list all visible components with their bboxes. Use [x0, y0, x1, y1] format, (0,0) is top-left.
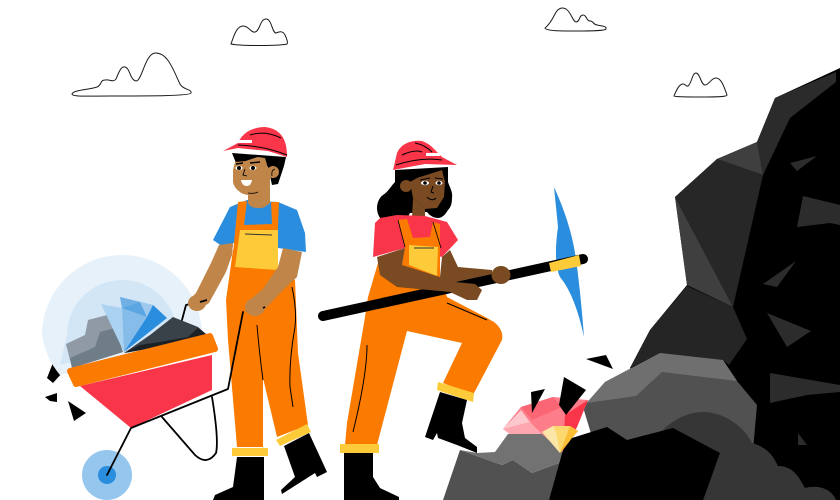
smile — [241, 180, 252, 186]
cuff back — [276, 424, 311, 446]
cuff knee — [437, 382, 474, 402]
low grey rock under woman's boot — [443, 434, 563, 500]
ear line — [272, 169, 275, 176]
ear — [267, 166, 279, 178]
flying rock shards — [45, 355, 613, 421]
left hand — [188, 295, 206, 311]
rock mountain — [583, 68, 840, 500]
straps — [398, 219, 440, 277]
face — [410, 170, 445, 209]
trouser lines — [257, 287, 296, 407]
strap outlines — [398, 220, 441, 248]
mountain black mass — [620, 68, 840, 500]
boulder light top — [587, 353, 737, 403]
foreground black rock — [549, 427, 720, 500]
mouth and nose — [427, 186, 436, 200]
glow inner — [60, 280, 177, 365]
eyes — [236, 162, 260, 170]
neck — [412, 198, 425, 218]
gem top facet — [120, 297, 140, 308]
eyes — [420, 178, 443, 185]
left handle — [182, 300, 207, 320]
gem pale facet — [140, 302, 153, 317]
bib pocket — [235, 230, 278, 270]
ruby red facet — [563, 400, 588, 453]
hat details — [396, 143, 442, 165]
overalls legs and torso — [345, 263, 502, 445]
cloud: top centre — [545, 8, 606, 31]
face and neck — [233, 157, 270, 208]
cloud: small left — [231, 19, 287, 46]
coal — [124, 317, 206, 353]
hub — [98, 466, 116, 484]
diamond body — [542, 426, 578, 453]
ruby top facet — [521, 397, 562, 420]
left arm — [189, 243, 233, 311]
coal dark — [124, 328, 206, 353]
boulder dark mound — [663, 412, 836, 500]
man miner arms — [188, 243, 302, 316]
tray body — [80, 355, 212, 428]
pickaxe — [323, 187, 584, 337]
yellow diamond gem — [542, 426, 578, 453]
gem upper facet — [122, 302, 147, 317]
gems in rock — [503, 397, 588, 453]
right arm — [245, 248, 302, 315]
chin line — [248, 192, 258, 193]
ruby lower light facet — [503, 422, 542, 434]
embedded shards — [763, 156, 840, 445]
cuff front — [232, 448, 268, 456]
ruby base — [503, 397, 588, 453]
wheel — [82, 450, 132, 500]
hat highlight — [238, 140, 252, 143]
trouser lines — [353, 303, 487, 432]
gem left light facet — [101, 304, 124, 352]
boot front — [213, 457, 264, 500]
tray rim — [70, 336, 215, 384]
woman arm and hands — [377, 248, 510, 300]
boot back — [425, 392, 477, 453]
upper hand — [492, 266, 510, 284]
gem dark facet — [124, 305, 167, 352]
handle end right — [263, 307, 265, 308]
glow outer — [42, 255, 202, 375]
straps — [233, 201, 279, 253]
shirt — [213, 200, 306, 253]
hat highlight — [426, 153, 440, 156]
bib pocket — [409, 245, 438, 276]
boot front — [344, 453, 399, 500]
nose — [243, 169, 247, 176]
diamond pale side — [542, 426, 560, 453]
facet: upper light — [717, 142, 763, 175]
boot back — [281, 433, 327, 494]
clouds — [72, 8, 727, 97]
hair — [377, 167, 452, 224]
frame — [107, 312, 243, 475]
cuff front — [340, 444, 379, 453]
pocket line — [245, 234, 272, 235]
ruby pale facet — [503, 410, 530, 429]
facet: upper dark — [675, 159, 763, 307]
ear — [400, 180, 412, 192]
diamond orange side — [560, 426, 578, 453]
cloud: large left — [72, 53, 191, 96]
hat — [393, 141, 457, 170]
handle end — [200, 300, 207, 302]
cloud: top right — [674, 73, 727, 97]
rock dark part — [443, 450, 562, 500]
facet: lower dark — [630, 286, 747, 368]
gem centre — [120, 297, 153, 352]
arm with lower hand — [377, 248, 492, 300]
hat — [223, 127, 287, 157]
rock light part — [460, 434, 563, 473]
woman miner body — [340, 141, 502, 500]
right hand — [245, 298, 265, 316]
handle — [323, 259, 583, 316]
boulder mid grey — [583, 353, 757, 470]
wheelbarrow — [42, 255, 243, 500]
pocket line — [414, 247, 434, 249]
leg — [162, 397, 217, 460]
yellow band — [549, 255, 581, 272]
grey rock — [66, 315, 123, 368]
facet: top ridge — [757, 72, 836, 175]
man miner body — [213, 127, 327, 500]
legs and torso — [226, 250, 308, 447]
grey rock shade — [70, 328, 123, 368]
facet: left light — [675, 197, 733, 307]
hair — [232, 153, 286, 185]
hat details — [238, 133, 287, 155]
shirt — [373, 215, 458, 257]
pick head — [554, 187, 584, 337]
